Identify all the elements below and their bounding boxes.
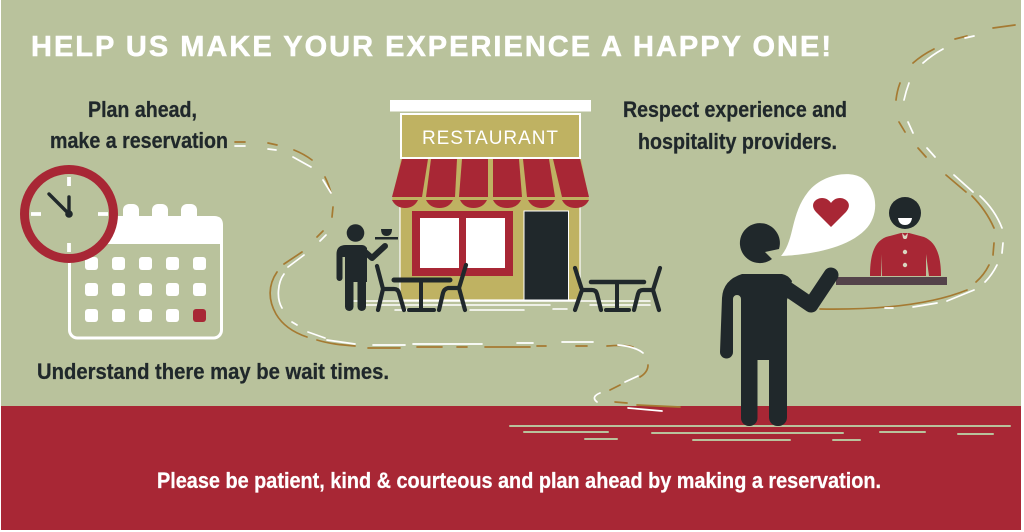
large customer figure — [720, 223, 831, 426]
door — [524, 211, 568, 300]
dashed path: right side — [820, 25, 1015, 309]
ground lines — [353, 301, 650, 310]
text: plan ahead: make a reservation — [50, 128, 228, 153]
sign — [401, 114, 580, 158]
restaurant building — [390, 100, 591, 300]
speech bubble with heart — [781, 174, 875, 256]
floor lines — [510, 426, 1010, 440]
roof — [390, 100, 591, 112]
footer text: Please be patient, kind & courteous and plan ahead by making a reservation. — [157, 468, 881, 493]
icon: small waiter — [336, 224, 398, 311]
icon: heart — [813, 198, 849, 227]
text: respect providers: hospitality providers. — [638, 129, 837, 154]
title: HELP US MAKE YOUR EXPERIENCE A HAPPY ONE! — [31, 31, 831, 63]
awning — [392, 159, 589, 208]
window — [412, 211, 513, 276]
icon: clock — [24, 170, 114, 258]
text: plan ahead — [50, 97, 228, 153]
counter — [836, 277, 947, 285]
text: wait times: Understand there may be wait times. — [37, 359, 389, 384]
right arm — [786, 275, 831, 305]
head — [740, 223, 780, 263]
icon: calendar — [70, 204, 223, 338]
host behind counter — [870, 197, 941, 276]
red floor band — [1, 406, 1021, 530]
legs — [741, 340, 758, 426]
text: respect providers: Respect experience and — [623, 97, 847, 122]
building wall — [400, 198, 580, 300]
text: plan ahead: Plan ahead, — [88, 97, 197, 122]
torso and left arm — [720, 274, 792, 360]
table set left — [377, 265, 466, 310]
table set right — [575, 268, 660, 310]
dashed path: left and bottom — [235, 142, 680, 411]
background panel — [1, 0, 1021, 407]
sign: RESTAURANT — [422, 128, 558, 149]
text: respect providers — [623, 97, 847, 154]
